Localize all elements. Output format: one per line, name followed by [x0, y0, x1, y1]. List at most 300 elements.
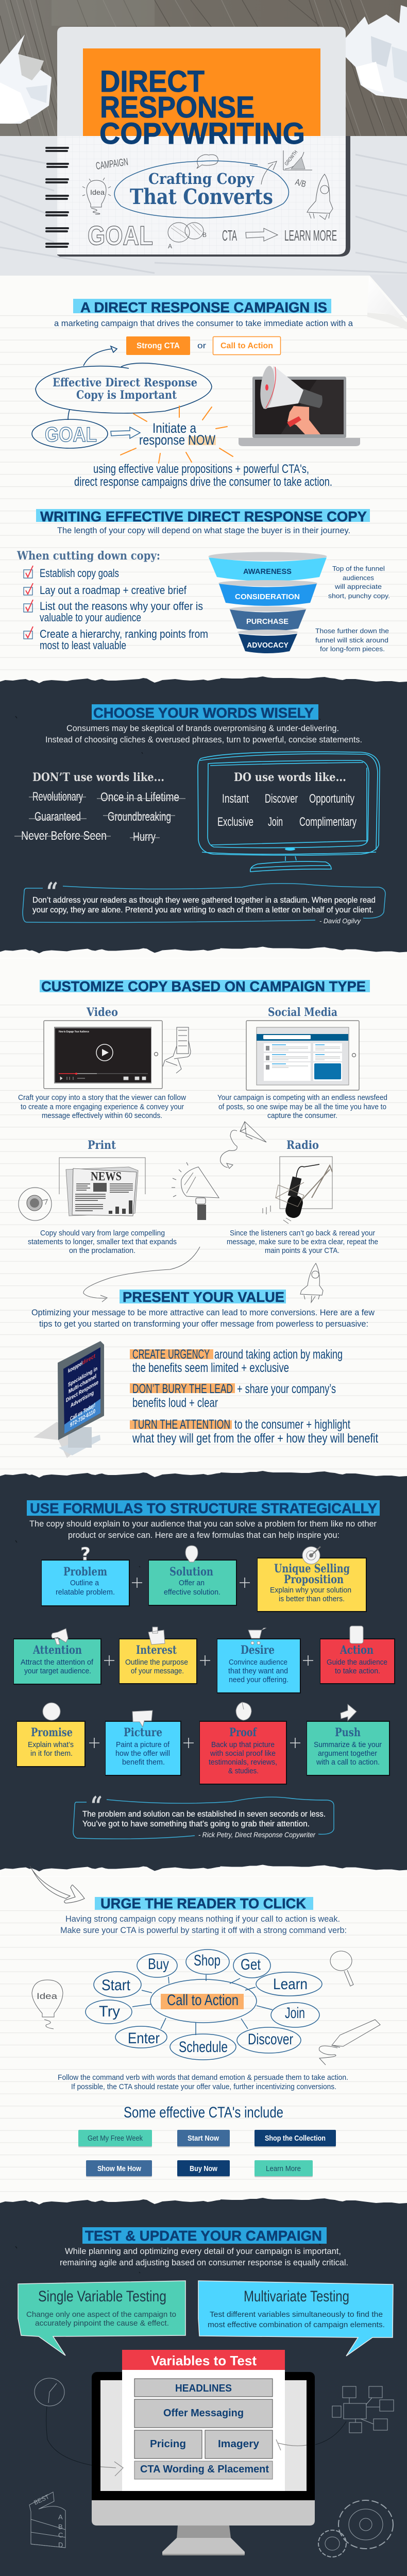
heading highlight [36, 509, 370, 522]
panel: radio: message, make sure to be extra clear, repeat the [227, 1238, 378, 1246]
note: desire [217, 1638, 301, 1693]
panel: video: message effectively within 60 seconds. [42, 1112, 162, 1120]
speech bubble: multivariate: most effective combination of campaign elements. [208, 2321, 385, 2329]
curved arrow to heading [83, 1247, 200, 1302]
speech bubble: multivariate: Multivariate Testing [244, 2288, 349, 2305]
cta buttons [78, 2130, 336, 2177]
billboard illustration: Advertising [71, 1389, 94, 1409]
billboard illustration: Direct Response [66, 1378, 98, 1404]
note: attention [13, 1638, 101, 1685]
gears sketch [318, 2500, 393, 2557]
funnel: PURCHASE [246, 617, 289, 626]
orange screen [83, 48, 320, 136]
megaphone [259, 365, 323, 410]
sketched monitor [198, 752, 380, 872]
checklist [24, 566, 208, 652]
monitor with variables list: Pricing [150, 2438, 186, 2450]
billboard illustration: koeppel [68, 1360, 82, 1375]
heading highlight [120, 1290, 286, 1303]
section: urge the reader to click [30, 1866, 380, 2177]
heading highlight [40, 980, 370, 992]
funnel bottom note: funnel will stick around [315, 636, 388, 644]
strong cta button: Strong CTA [137, 342, 180, 350]
note: proof: Back up that picture [211, 1741, 275, 1749]
checklist: Lay out a roadmap + creative brief [40, 584, 187, 597]
monitor with variables list: Variables to Test [151, 2353, 257, 2368]
formula row 3 [16, 1702, 390, 1785]
icon: pie chart [236, 1702, 251, 1720]
importance text: Copy is Important [76, 388, 177, 402]
strong cta button [126, 336, 190, 355]
note: promise [16, 1721, 86, 1767]
formula row 2 [13, 1626, 395, 1693]
do list words: Discover [265, 792, 298, 806]
tips list: CREATE URGENCY [132, 1347, 210, 1362]
cta buttons: Shop the Collection [265, 2134, 326, 2143]
note: usp: is better than others. [279, 1595, 345, 1603]
sub text: Consumers may be skeptical of brands overpromising & under-delivering. [66, 723, 339, 733]
speech bubble: single variable: accurately pinpoint the cause & effect. [35, 2319, 169, 2328]
mind map: Get [241, 1956, 261, 1973]
heading highlight [95, 1897, 313, 1910]
don't list words: Groundbreaking [108, 810, 171, 824]
funnel top note: Top of the funnel [332, 565, 385, 572]
checklist: Establish copy goals [40, 567, 119, 580]
checklist: Create a hierarchy, ranking points from [40, 628, 208, 640]
icon: light bulb [185, 1546, 198, 1562]
note: desire: Desire [241, 1643, 275, 1657]
monitor with variables list: CTA Wording & Placement [140, 2464, 269, 2475]
connector to goal [68, 410, 70, 420]
heading highlight [92, 704, 318, 720]
don't list words [14, 790, 185, 844]
summary handwritten text: direct response campaigns drive the consumer to take action. [74, 475, 332, 489]
panel: social media: capture the consumer. [267, 1112, 337, 1120]
definition text: a marketing campaign that drives the consumer to take immediate action with a [54, 318, 353, 328]
plus [104, 1655, 114, 1666]
subtitle text: That Converts [130, 184, 273, 209]
do list words: Opportunity [309, 792, 354, 806]
note: usp [257, 1557, 367, 1612]
note: attention: your target audience. [24, 1667, 91, 1675]
tips list: TURN THE ATTENTION [132, 1417, 230, 1432]
billboard illustration [33, 1341, 104, 1458]
speech bubble: single variable: Change only one aspect of the campaign to [26, 2311, 176, 2319]
hand with phone [163, 1027, 191, 1073]
heading highlight [82, 2227, 327, 2244]
crumpled paper left [0, 35, 52, 124]
icon: phone [350, 1626, 363, 1643]
idea bulb [82, 178, 111, 214]
initiate text [139, 420, 215, 448]
mind map: Buy [148, 1956, 169, 1973]
funnel: CONSIDERATION [235, 592, 300, 601]
heading: URGE THE READER TO CLICK [100, 1895, 306, 1911]
body text [58, 2073, 348, 2091]
quote box: The problem and solution can be established in seven seconds or less. [82, 1810, 326, 1819]
sub text: remaining agile and adjusting based on consumer response is equally critical. [60, 2258, 348, 2267]
icon: clipboard [148, 1627, 165, 1645]
arrow to buttons [83, 346, 117, 366]
best list sketch [29, 2492, 65, 2549]
note: picture: how the offer will [115, 1750, 170, 1758]
funnel top note: short, punchy copy. [328, 592, 390, 600]
goal word: GOAL [45, 423, 97, 446]
newspaper: NEWS [91, 1170, 122, 1183]
note: action: Action [340, 1643, 374, 1657]
monitor with variables list: Offer Messaging [163, 2408, 244, 2419]
sub text: While planning and optimizing every detail of your campaign is important, [65, 2246, 341, 2256]
rocket sketch [300, 1263, 323, 1302]
monitor with variables list: HEADLINES [175, 2383, 232, 2394]
panel: print: statements to longer, smaller text that expands [28, 1238, 177, 1246]
quote box: “ [91, 1790, 103, 1821]
plus [89, 1738, 99, 1748]
mind map: Discover [248, 2031, 293, 2048]
word: campaign: CAMPAIGN [95, 156, 129, 172]
sub text [29, 1519, 377, 1540]
heading: CUSTOMIZE COPY BASED ON CAMPAIGN TYPE [41, 978, 366, 994]
section: present your value [31, 1247, 378, 1458]
heading: TEST & UPDATE YOUR CAMPAIGN [85, 2228, 322, 2244]
mind map: Learn [273, 1976, 308, 1993]
mind map: Shop [194, 1952, 221, 1969]
venn diagram: A [168, 243, 172, 250]
billboard illustration: direct [82, 1352, 95, 1366]
tips list: DON’T BURY THE LEAD [132, 1382, 233, 1396]
note: proof: with social proof like [210, 1750, 276, 1758]
tips list [130, 1347, 378, 1446]
note: solution: Offer an [179, 1579, 205, 1587]
do list heading: DO use words like... [234, 771, 346, 784]
panel: video: to create a more engaging experience & convey your [21, 1103, 184, 1111]
panel: video: Craft your copy into a story that the viewer can follow [18, 1094, 186, 1102]
best list sketch: D [58, 2541, 63, 2549]
funnel top note [328, 565, 390, 600]
speech bubble: multivariate: Test different variables simultaneously to find the [210, 2311, 383, 2319]
note: interest [119, 1638, 197, 1684]
funnel top note: audiences [343, 574, 375, 582]
billboard illustration: Multi-channel [69, 1372, 96, 1395]
panel: social media [217, 1006, 387, 1120]
billboard illustration: 972-732-6110 [70, 1407, 95, 1429]
checklist: valuable to your audience [40, 611, 141, 624]
word: or: or [197, 342, 207, 350]
mind map: Start [101, 1977, 131, 1994]
note: interest: Outline the purpose [125, 1658, 188, 1667]
tips list: to the consumer + highlight [234, 1417, 350, 1432]
heading: PRESENT YOUR VALUE [123, 1289, 284, 1305]
note: proof: Proof [229, 1726, 257, 1739]
panel: radio: Since the listeners can’t go back & reread your [230, 1229, 375, 1238]
sub text: tips to get you started on transforming your offer message from powerless to persuasive: [39, 1319, 368, 1329]
sub text: Having strong campaign copy means nothing if your call to action is weak. [65, 1914, 340, 1924]
venn diagram [168, 223, 207, 250]
quote box: “ [46, 876, 58, 907]
cta buttons: Get My Free Week [88, 2134, 143, 2143]
hero: wood desk with tablet [0, 0, 407, 136]
icon: arrow [341, 1704, 357, 1721]
up arrow [261, 161, 277, 184]
spiral binding [46, 148, 68, 247]
documents network sketch [315, 2386, 394, 2445]
monitor with variables list: Imagery [218, 2438, 260, 2450]
don't list words: Hurry [133, 830, 156, 844]
best list sketch: B [58, 2523, 63, 2531]
billboard illustration: Specializing in [68, 1365, 97, 1388]
heading: USE FORMULAS TO STRUCTURE STRATEGICALLY [30, 1500, 377, 1516]
panel: print [19, 1139, 177, 1255]
note: action [320, 1638, 395, 1684]
subtitle ellipse [114, 161, 289, 218]
panel: radio: main points & your CTA. [265, 1247, 340, 1255]
funnel bottom note [315, 627, 389, 653]
section: a direct response campaign is [32, 299, 360, 489]
panel: social media: Social Media [268, 1006, 337, 1019]
sketch arrow [246, 228, 278, 241]
hero title: RESPONSE [100, 91, 255, 124]
quote box [23, 876, 385, 925]
note: picture: benefit them. [122, 1758, 165, 1767]
speech bubble: single variable [18, 2281, 185, 2355]
note: promise: Explain what’s [28, 1741, 74, 1749]
fist [287, 406, 320, 434]
sketched arrow [30, 1866, 84, 1903]
note: interest: Interest [136, 1643, 177, 1657]
panel: social media: Your campaign is competing with an endless newsfeed [217, 1094, 387, 1102]
hero title: COPYWRITING [99, 117, 305, 150]
monitor with variables list [92, 2350, 315, 2555]
icon: circular arrows [43, 1703, 60, 1720]
heading: WRITING EFFECTIVE DIRECT RESPONSE COPY [40, 509, 367, 524]
note: problem [41, 1560, 130, 1606]
now highlight [188, 436, 216, 445]
panel: print: Copy should vary from large compelling [40, 1229, 165, 1238]
do list words: Join [268, 815, 283, 829]
note: usp: Explain why your solution [270, 1586, 351, 1595]
summary handwritten text: using effective value propositions + powerful CTA's, [93, 462, 309, 476]
heading: CHOOSE YOUR WORDS WISELY [93, 705, 314, 721]
tips list: around taking action by making [214, 1347, 343, 1362]
speech bubble: single variable: Single Variable Testing [38, 2288, 166, 2305]
note: push: with a call to action. [316, 1758, 380, 1767]
initiate text: Initiate a [152, 420, 197, 436]
cta buttons: Buy Now [190, 2164, 217, 2173]
note: desire: Convince audience [229, 1658, 287, 1667]
billboard illustration: Call us Today! [70, 1401, 95, 1422]
call to action button [213, 337, 280, 354]
panel: print: on the proclamation. [69, 1247, 135, 1255]
sub text: The copy should explain to your audience that you can solve a problem for them like no other [29, 1519, 377, 1529]
do list words: Complimentary [299, 815, 357, 829]
note: push: Summarize & tie your [314, 1741, 382, 1749]
label: A/B: A/B [294, 177, 307, 189]
notebook page [57, 136, 350, 257]
tips list: the benefits seem limited + exclusive [132, 1361, 289, 1375]
tablet body [57, 27, 346, 136]
plus [132, 1578, 142, 1588]
note: desire: need your offering. [229, 1676, 289, 1684]
plus [200, 1655, 210, 1666]
tablet with feed [246, 1021, 359, 1090]
mind map: Try [99, 2003, 120, 2020]
tips list: + share your company’s [237, 1382, 336, 1396]
coffee cup [19, 1188, 52, 1221]
frame [59, 1158, 145, 1194]
don't list words: Revolutionary [32, 790, 83, 804]
tablet with player: How to Engage Your Audience [59, 1030, 89, 1033]
sub text [60, 1914, 347, 1935]
mind map: Schedule [179, 2039, 228, 2056]
icon: cart [248, 1628, 266, 1645]
magnifying glass sketch [330, 1951, 353, 1986]
section: choose your words wisely [14, 704, 385, 925]
growth chart [283, 149, 312, 170]
hero sketches around subtitle [82, 149, 337, 251]
tablet with player [44, 1021, 162, 1089]
plus [303, 1655, 313, 1666]
note: desire: that they want and [228, 1667, 288, 1675]
note: usp: Unique Selling [274, 1562, 350, 1575]
importance ellipse [36, 363, 212, 413]
venn diagram: B [202, 231, 207, 239]
sub text: The length of your copy will depend on what stage the buyer is in their journey. [57, 526, 350, 535]
mind map: Call to Action [167, 1992, 239, 2009]
note: proof [199, 1721, 287, 1785]
panel: video: Video [86, 1006, 118, 1019]
importance text [53, 376, 197, 402]
sub text [31, 1308, 375, 1329]
quote box: - David Ogilvy [319, 917, 361, 925]
body text: Follow the command verb with words that demand emotion & persuade them to take action. [58, 2073, 348, 2082]
don't list heading: DON’T use words like... [32, 771, 164, 784]
note: solution: effective solution. [164, 1588, 221, 1597]
don't list words: Once in a Lifetime [100, 790, 179, 804]
speech cloud [197, 155, 218, 168]
tips list: benefits loud + clear [132, 1396, 218, 1410]
section: writing effective direct response copy [16, 509, 390, 653]
mind map: Join [285, 2005, 305, 2022]
funnel bottom note: Those further down the [315, 627, 389, 635]
note: push: argument together [318, 1750, 377, 1758]
note: picture: Paint a picture of [116, 1741, 170, 1749]
call to action button: Call to Action [221, 342, 273, 350]
panel: radio [227, 1139, 378, 1255]
quote box: - Rick Petry, Direct Response Copywriter [198, 1831, 316, 1839]
clock sketch with wire [35, 2378, 92, 2465]
section: test and update your campaign [18, 2227, 394, 2557]
formula row 1 [41, 1544, 367, 1612]
laptop with megaphone [239, 365, 360, 446]
note: usp: Proposition [284, 1573, 344, 1586]
icon: megaphone [52, 1629, 68, 1645]
do list words [217, 792, 357, 829]
note: attention: Attention [32, 1643, 82, 1657]
note: problem: Outline a [70, 1579, 99, 1587]
checklist: most to least valuable [40, 639, 126, 652]
note: push: Push [335, 1726, 361, 1739]
quote box: You’ve got to have something that’s going to grab their attention. [82, 1820, 310, 1828]
icon: question mark: ? [80, 1544, 91, 1565]
note: attention: Attract the attention of [21, 1658, 94, 1667]
panel: radio: Radio [286, 1139, 319, 1152]
goal ellipse [32, 419, 108, 448]
crumpled paper right [343, 5, 407, 99]
checklist heading: When cutting down copy: [16, 549, 160, 563]
mind map: Enter [128, 2030, 160, 2047]
sub text: product or service can. Here are a few formulas that can help inspire you: [68, 1530, 340, 1540]
cta buttons: Show Me How [97, 2164, 141, 2173]
note: problem: relatable problem. [56, 1588, 115, 1597]
summary handwritten text [74, 462, 332, 489]
note: promise: in it for them. [30, 1750, 73, 1758]
section: customize copy based on campaign type [18, 978, 387, 1255]
subtitle text: Crafting Copy [148, 170, 255, 188]
frame [280, 1157, 332, 1209]
mind map [86, 1950, 322, 2060]
panel: video [18, 1006, 191, 1120]
panel: print: Print [88, 1139, 116, 1152]
cta buttons: Start Now [188, 2134, 219, 2143]
label: learn more: LEARN MORE [284, 228, 337, 244]
initiate text: response NOW [139, 432, 215, 448]
hero: notebook on light desk [0, 136, 407, 276]
quote box: Don’t address your readers as though they were gathered together in a stadium. When people read [32, 896, 376, 905]
note: action: to take action. [335, 1667, 380, 1675]
plus [290, 1738, 300, 1748]
microphone [263, 1164, 332, 1224]
funnel bottom note: for long-form pieces. [320, 645, 385, 653]
quote box: your copy, they are alone. Pretend you are writing to each of them a letter on behalf of your client. [32, 906, 374, 914]
goal outlined word: GOAL [88, 221, 153, 251]
note: picture: Picture [124, 1726, 162, 1739]
body text: If possible, the CTA should restate your offer value, further incentivizing conversions. [71, 2082, 336, 2091]
note: problem: Problem [63, 1565, 107, 1579]
paper plane with looping trail [221, 1122, 266, 1168]
funnel [208, 552, 327, 653]
note: interest: of your message. [131, 1667, 184, 1675]
sub text: Optimizing your message to be more attractive can lead to more conversions. Here are a few [31, 1308, 375, 1317]
funnel: AWARENESS [243, 567, 292, 576]
note: proof: & studies. [228, 1767, 259, 1775]
section: use formulas to structure strategically [13, 1500, 395, 1839]
checklist: List out the reasons why your offer is [40, 600, 203, 613]
plus [240, 1578, 250, 1588]
hero title: DIRECT [100, 65, 205, 98]
note: solution [148, 1560, 237, 1606]
heading highlight [73, 299, 331, 313]
note: promise: Promise [31, 1726, 73, 1739]
don't list words: Never Before Seen [21, 829, 107, 843]
subtitle text [130, 170, 273, 209]
page curl [367, 275, 407, 330]
sketched megaphone [172, 1162, 219, 1220]
orange rays [121, 406, 233, 463]
heading: A DIRECT RESPONSE CAMPAIGN IS [80, 299, 327, 315]
don't list words: Guaranteed [35, 810, 81, 824]
idea bulb sketch [32, 1980, 63, 2029]
icon: target [302, 1547, 320, 1564]
sub text: Instead of choosing cliches & overused phrases, turn to powerful, concise statements. [45, 735, 362, 744]
dark section backgrounds with torn edges [0, 676, 407, 2576]
importance text: Effective Direct Response [53, 376, 197, 389]
note: solution: Solution [169, 1565, 213, 1579]
cta examples heading: Some effective CTA's include [124, 2104, 283, 2121]
funnel: ADVOCACY [247, 641, 289, 650]
speech bubble: multivariate [198, 2281, 393, 2356]
do list words: Instant [222, 792, 249, 806]
idea bulb sketch: Idea [37, 1991, 58, 2001]
